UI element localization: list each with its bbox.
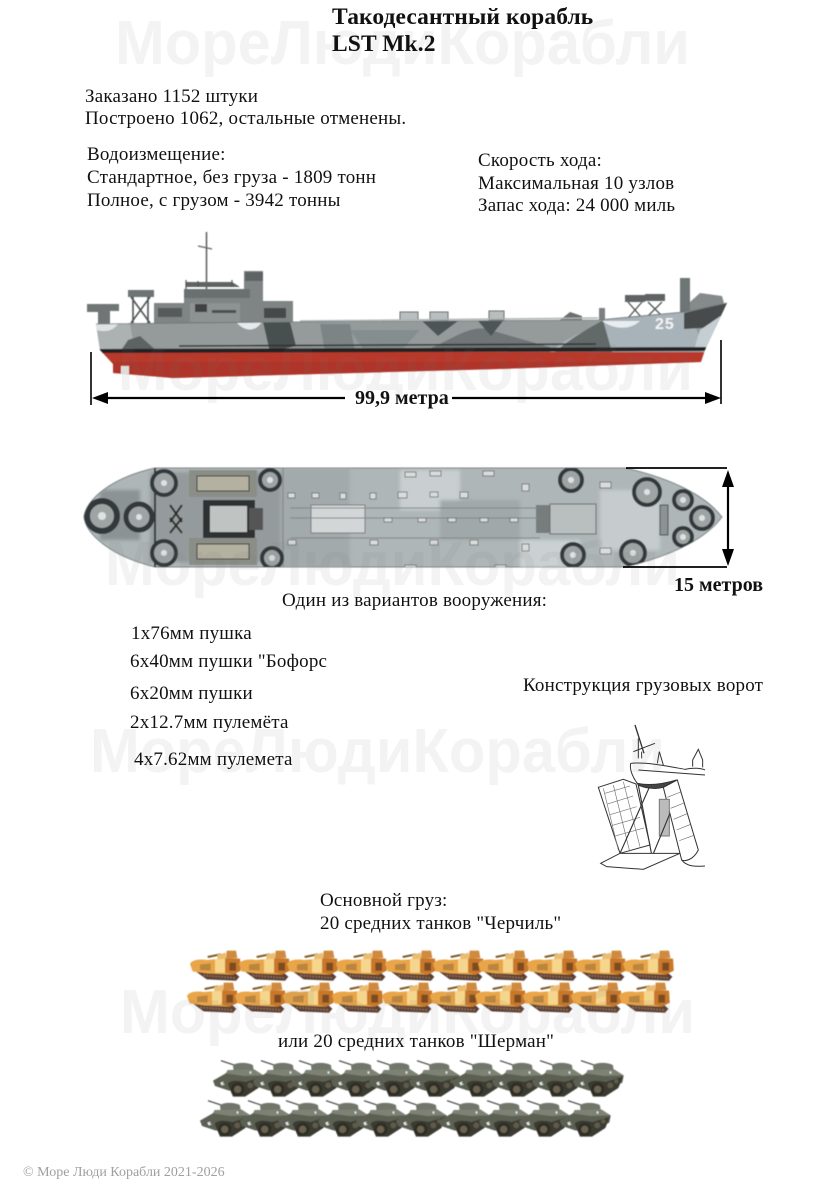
heading: cargo doors: Конструкция грузовых ворот xyxy=(523,675,764,696)
watermarks: МореЛюдиКорабли xyxy=(90,717,665,786)
text: Sherman alternative: или 20 средних танков "Шерман" xyxy=(278,1031,554,1052)
hull number: 25 xyxy=(655,316,675,333)
text block: displacement xyxy=(87,144,376,211)
title xyxy=(332,4,593,57)
deck outline xyxy=(84,468,722,567)
ramp struts and deck plate xyxy=(601,780,705,869)
text block: production numbers: Построено 1062, остальные отменены. xyxy=(85,108,406,129)
text block: production numbers xyxy=(85,86,406,129)
superstructure xyxy=(87,271,724,324)
dimension: length arrow xyxy=(91,340,721,409)
illustration: ship top view xyxy=(84,468,722,568)
text block: displacement: Полное, с грузом - 3942 тонны xyxy=(87,190,341,211)
text block: main cargo xyxy=(320,890,561,934)
illustration: Churchill tanks, row 2 xyxy=(187,983,670,1013)
text block: speed and range: Скорость хода: xyxy=(478,150,602,171)
text block: speed and range: Максимальная 10 узлов xyxy=(478,173,674,194)
text block: speed and range xyxy=(478,150,675,216)
watermarks xyxy=(90,9,695,1047)
right door panel xyxy=(659,780,698,861)
text block: displacement: Водоизмещение: xyxy=(87,144,226,165)
text block: armament xyxy=(130,590,547,770)
mast xyxy=(198,232,212,290)
text block: armament: 6х20мм пушки xyxy=(130,683,253,704)
copyright: © Море Люди Корабли 2021-2026 xyxy=(23,1165,225,1180)
watermarks: МореЛюдиКорабли xyxy=(120,978,695,1047)
illustration: Sherman tanks, row 2 xyxy=(200,1101,611,1137)
text block: speed and range: Запас хода: 24 000 миль xyxy=(478,195,675,216)
deck house and fittings xyxy=(203,500,255,540)
watermarks: МореЛюдиКорабли xyxy=(105,530,680,599)
watermarks: МореЛюдиКорабли xyxy=(115,9,690,78)
text block: production numbers: Заказано 1152 штуки xyxy=(85,86,258,107)
illustration: cargo doors xyxy=(598,725,705,869)
dimension: beam arrow: 15 метров xyxy=(674,574,763,596)
title: Такодесантный корабль xyxy=(332,4,593,30)
deck mottling xyxy=(100,468,660,568)
illustration: ship side profile xyxy=(87,232,730,382)
text block: main cargo: Основной груз: xyxy=(320,890,448,911)
text block: armament: 1х76мм пушка xyxy=(131,623,252,644)
gun tubs xyxy=(87,469,713,568)
dimension: length arrow: 99,9 метра xyxy=(355,387,449,409)
dimension: beam arrow xyxy=(623,468,763,596)
illustration: Sherman tanks, row 1 xyxy=(213,1061,624,1097)
open door, grid xyxy=(598,779,650,853)
text block: displacement: Стандартное, без груза - 1809 тонн xyxy=(87,167,376,188)
text block: armament: 6х40мм пушки "Бофорс xyxy=(130,651,327,672)
hull with camouflage xyxy=(90,300,730,382)
text block: armament: Один из вариантов вооружения: xyxy=(282,590,547,611)
title: LST Mk.2 xyxy=(332,31,436,57)
text block: armament: 2х12.7мм пулемёта xyxy=(130,712,289,733)
illustration: Churchill tanks, row 1 xyxy=(190,951,674,981)
ship bow line drawing xyxy=(630,725,705,783)
text block: armament: 4х7.62мм пулемета xyxy=(134,749,293,770)
watermarks: МореЛюдиКорабли xyxy=(118,335,693,404)
text block: main cargo: 20 средних танков "Черчиль" xyxy=(320,913,561,934)
